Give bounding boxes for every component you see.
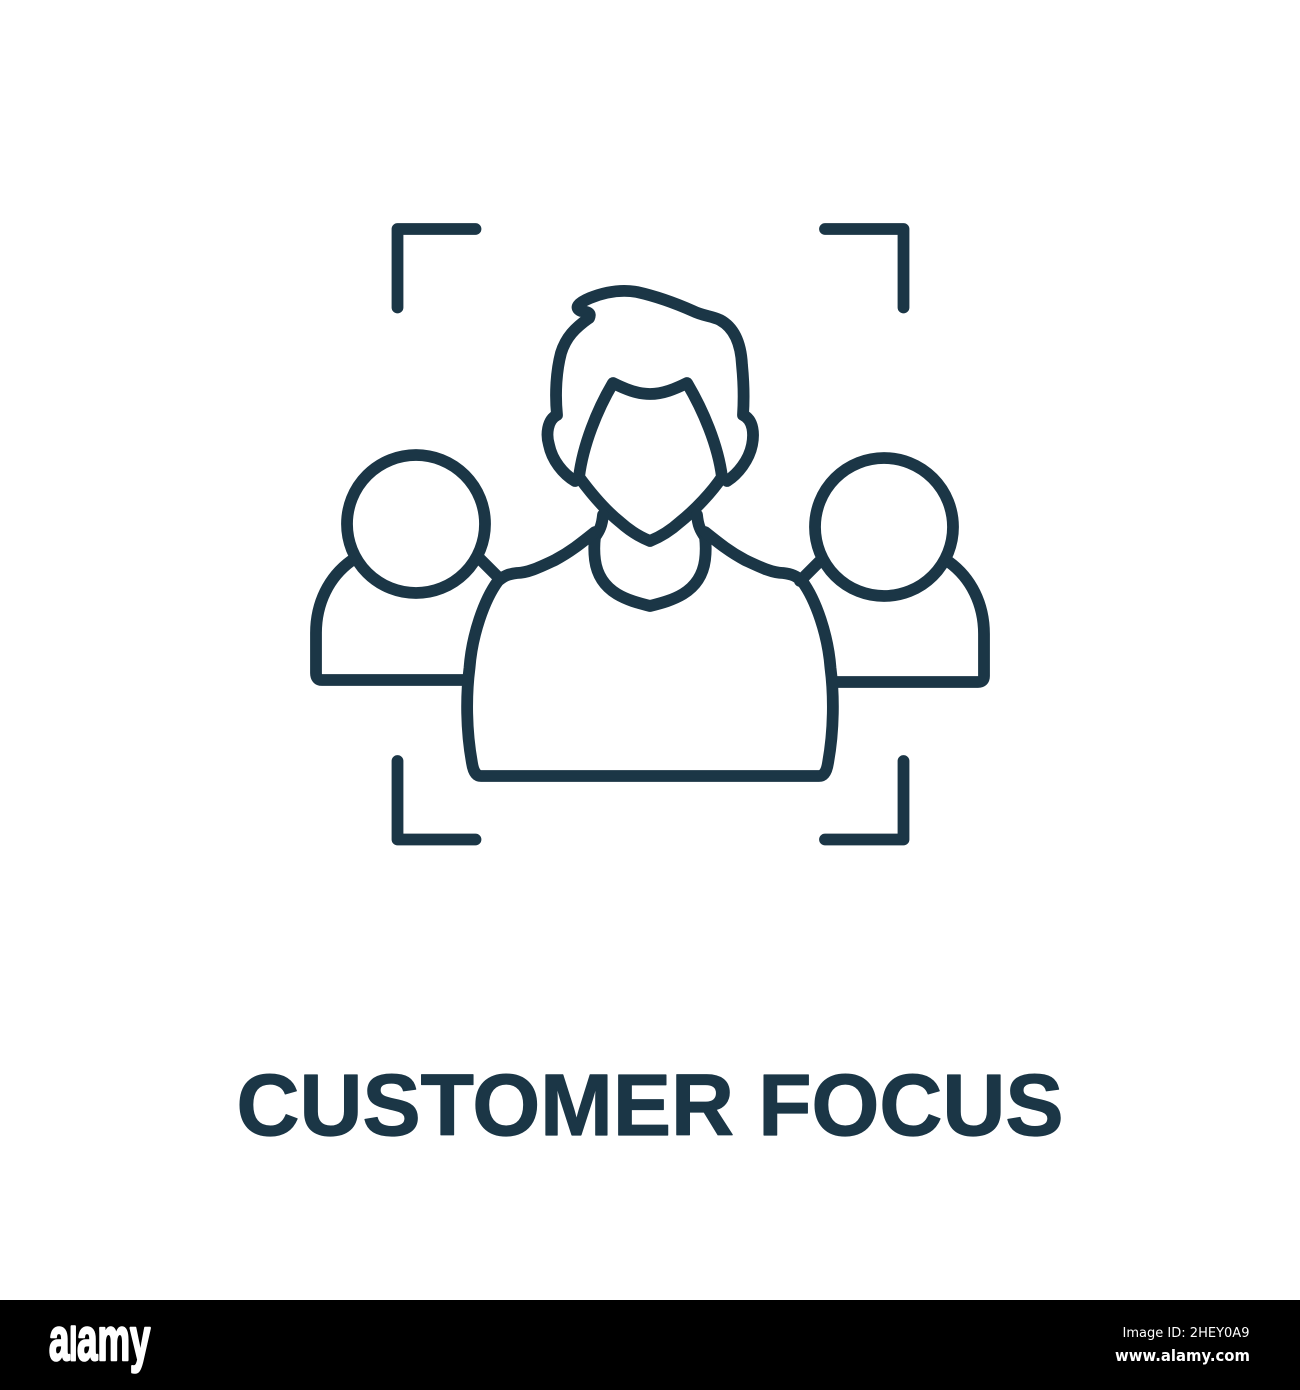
torso: [467, 532, 833, 776]
icon: left customer: [316, 455, 500, 680]
title: CUSTOMER FOCUS: [236, 1057, 1064, 1154]
image id: Image ID: 2HEY0A9: [1122, 1326, 1250, 1341]
face: [579, 383, 722, 541]
icon: central person: [467, 291, 833, 776]
icon: right customer: [800, 458, 984, 682]
hair and ears: [578, 291, 753, 481]
footer bar: [0, 1300, 1300, 1390]
icon: customer focus group: [316, 229, 984, 840]
website: www.alamy.com: [1115, 1346, 1250, 1365]
alamy logo: alamy: [49, 1306, 151, 1373]
icon: focus frame corners: [398, 229, 904, 840]
neck and collar: [594, 515, 706, 606]
